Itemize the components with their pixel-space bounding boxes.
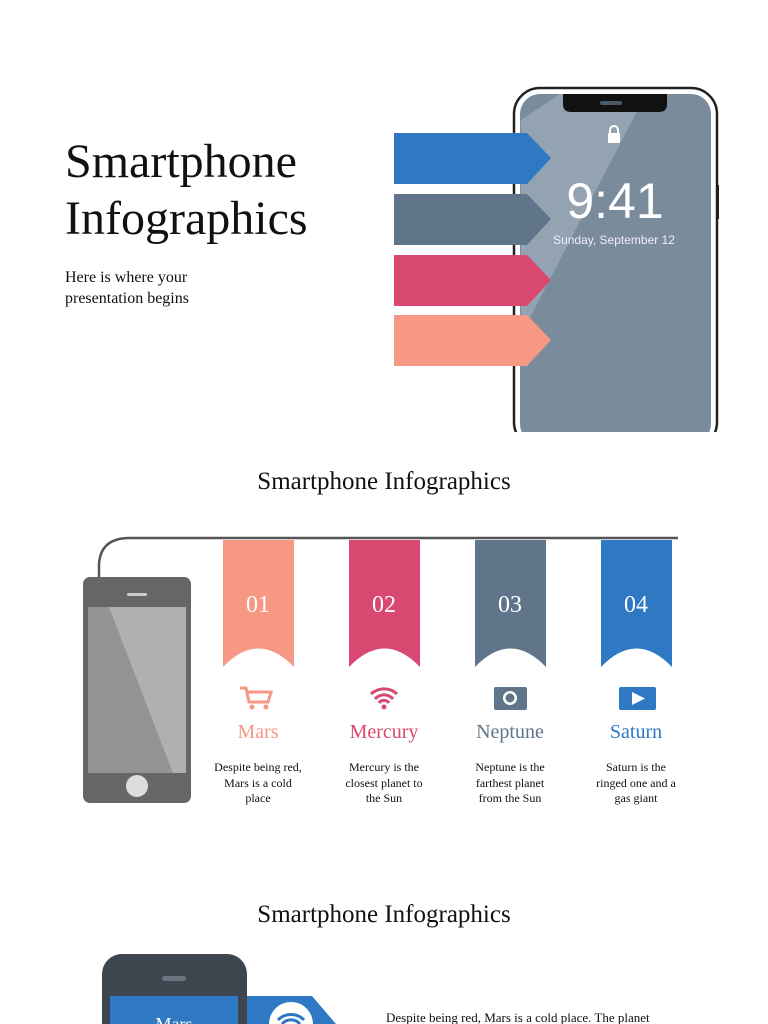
title	[65, 135, 308, 245]
names: Neptune	[476, 721, 544, 743]
names: Mars	[237, 721, 279, 743]
descriptions: Saturn is the	[606, 760, 666, 774]
arrows	[394, 133, 551, 366]
names: Mercury	[350, 721, 418, 743]
section 3 title: Smartphone Infographics	[257, 901, 511, 928]
descriptions: gas giant	[614, 791, 658, 805]
descriptions: from the Sun	[479, 791, 541, 805]
ribbons: 04	[624, 592, 648, 618]
phone top: 9:41	[566, 173, 664, 229]
phone gray	[83, 577, 191, 803]
title: Infographics	[65, 192, 308, 245]
phone top	[0, 88, 768, 452]
ribbons	[223, 540, 672, 667]
title: Smartphone	[65, 135, 297, 188]
ribbons: 01	[246, 592, 270, 618]
ribbons: 02	[372, 592, 396, 618]
descriptions: ringed one and a	[596, 776, 676, 790]
subtitle	[65, 269, 189, 307]
ribbons: 03	[498, 592, 522, 618]
names	[237, 721, 662, 743]
cable	[99, 538, 678, 577]
subtitle: Here is where your	[65, 269, 187, 286]
descriptions: Mercury is the	[349, 760, 419, 774]
section 2 title: Smartphone Infographics	[257, 468, 511, 495]
descriptions: the Sun	[366, 791, 402, 805]
names: Saturn	[610, 721, 662, 743]
descriptions: Despite being red,	[214, 760, 302, 774]
descriptions	[214, 760, 676, 805]
subtitle: presentation begins	[65, 290, 189, 307]
descriptions: place	[245, 791, 271, 805]
icons	[240, 687, 656, 710]
descriptions: Mars is a cold	[224, 776, 292, 790]
descriptions: closest planet to	[345, 776, 423, 790]
phone top: Sunday, September 12	[553, 233, 675, 247]
descriptions: farthest planet	[476, 776, 545, 790]
descriptions: Neptune is the	[475, 760, 545, 774]
